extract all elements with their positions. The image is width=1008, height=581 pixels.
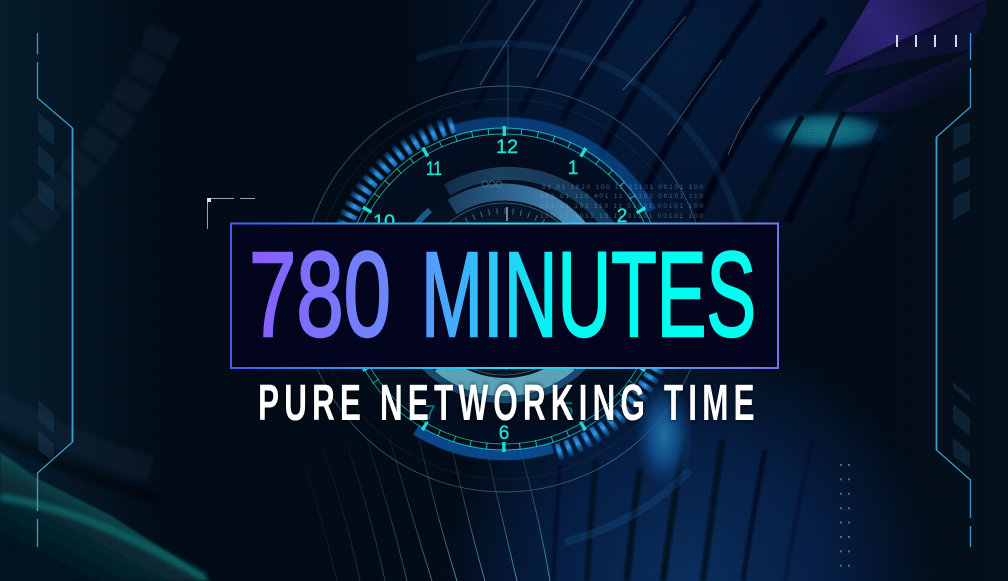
clock numerals: 1 [568,158,578,179]
title box [231,224,778,368]
left HUD frame line [38,33,72,547]
clock numerals: 6 [499,423,509,444]
title: 780 minutes [249,226,756,362]
tick ring [343,128,665,450]
clock numerals: 10 [373,212,395,233]
lower fan of thin lines [297,430,550,581]
clock numerals: 2 [617,206,627,227]
binary digits: 01 01 1020 100 11 01101 00101 100 [542,184,703,191]
glowing teal ellipse [760,111,892,170]
title: 780 minutes: MINUTES [421,226,756,362]
lower right blue glow [634,380,694,490]
dial face [351,136,657,442]
left faint curved segments [0,30,165,500]
right HUD frame line [936,33,970,547]
clock dial [301,43,748,542]
purple shape top right [823,0,987,112]
inner dial arc and ticks [418,203,590,375]
binary digits: 100 01 1011 10 11 01101 00101 100 [540,213,703,220]
white needle [506,207,508,221]
binary digits [540,184,703,220]
right HUD chevrons [953,122,970,468]
lower dark vertical ribs [553,440,812,581]
clock numerals: 5 [563,400,573,421]
small rings near 12 [482,181,502,187]
top right tick marks [897,35,956,47]
large outer orbit rings [301,43,748,542]
upper right dark ribs [440,0,890,222]
teal light streak bottom left [0,452,212,581]
subtitle: pure networking time: PURE NETWORKING TIME [258,374,755,431]
clock numerals: 12 [496,137,518,158]
dot columns bottom right [841,464,849,570]
left HUD chevrons [38,112,54,462]
inner rings [406,173,610,400]
corner bracket [207,198,255,229]
clock numerals [373,137,627,444]
upper ribs thin highlights [460,0,760,155]
petal segments [338,124,657,454]
clock numerals: 7 [425,403,435,424]
title: 780 minutes: 780 [249,226,391,362]
clock numerals: 11 [426,159,442,180]
blue rim [416,123,651,455]
binary digits: 101 01 101 110 11 01001 00101 100 [540,203,703,210]
binary digits: 103 01 110 401 11 01101 00101 110 [540,193,703,200]
